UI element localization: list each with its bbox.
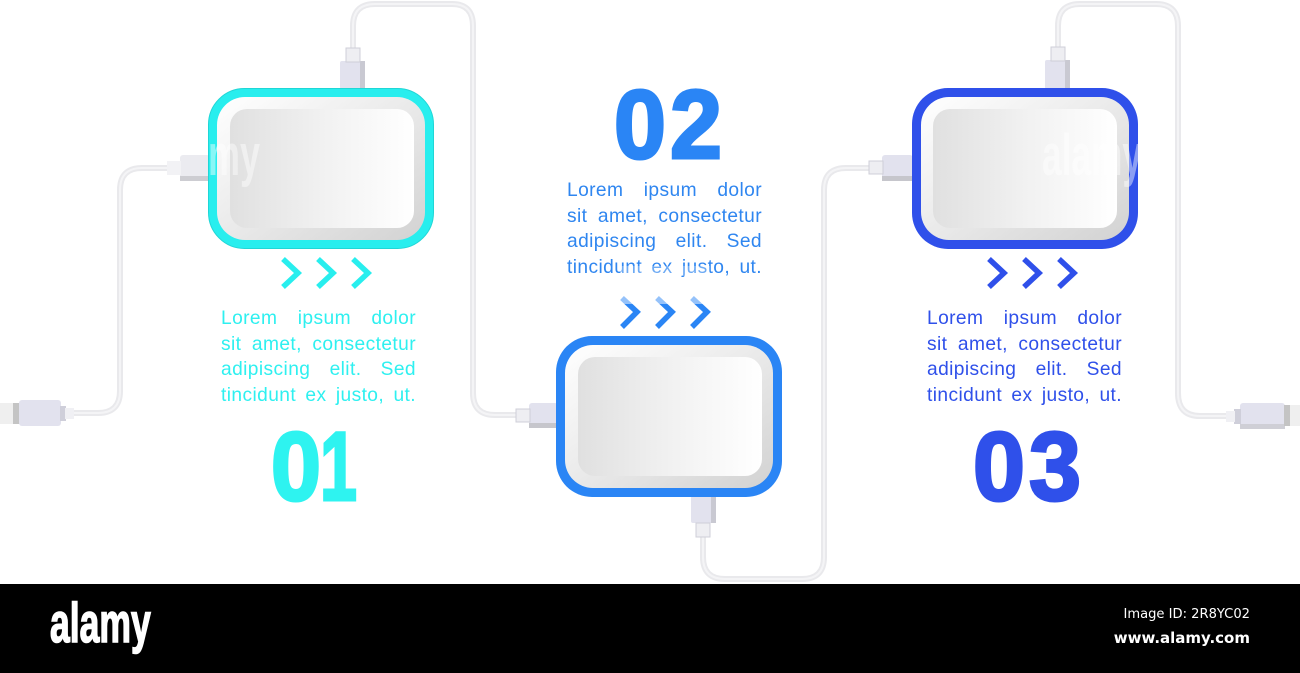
number 01: 1 [320, 412, 357, 521]
watermark on device 3: alamy [1042, 123, 1142, 188]
text block: step 3: sit amet, consectetur [927, 334, 1122, 355]
chevrons: step 2 [622, 298, 707, 327]
text block: step 2: tincidunt ex justo, ut. [567, 257, 762, 278]
number 03 [973, 412, 1081, 521]
cable: device 1 to device 2 [353, 4, 518, 415]
text block: step 3: adipiscing elit. Sed [927, 359, 1122, 380]
number 02: 0 [614, 70, 666, 179]
text block: step 2 [567, 180, 762, 278]
connector: device 2 bottom plug [691, 496, 716, 537]
image id: Image ID: 2R8YC02 [1123, 607, 1250, 622]
number 01: 0 [271, 412, 321, 521]
number 01 [271, 412, 357, 521]
text block: step 3 [927, 308, 1122, 406]
text block: step 2: Lorem ipsum dolor [567, 180, 762, 201]
connector: device 3 left plug [869, 155, 913, 181]
text block: step 2: adipiscing elit. Sed [567, 231, 762, 252]
cable: left connector to device 1 [70, 168, 170, 413]
device 2 [556, 336, 782, 497]
text block: step 3: Lorem ipsum dolor [927, 308, 1122, 329]
device 1 [208, 88, 434, 248]
text block: step 1 [221, 308, 416, 406]
connector: device 1 left plug [167, 155, 210, 181]
connector: device 1 top plug [340, 48, 365, 89]
text block: step 2: sit amet, consectetur [567, 206, 762, 227]
text block: step 1: sit amet, consectetur [221, 334, 416, 355]
number 02: 2 [670, 70, 722, 179]
connector: far right plug [1226, 403, 1300, 429]
cable: device 2 to device 3 [703, 168, 870, 579]
footer bar [0, 584, 1300, 673]
chevrons: step 1 [283, 259, 368, 287]
number 03: 0 [973, 412, 1025, 521]
number 02 [614, 70, 722, 179]
cable: device 3 to right connector [1058, 4, 1230, 416]
watermark on device 1: my [208, 123, 260, 188]
connector: device 2 left plug [516, 403, 558, 428]
connector: far left plug [0, 400, 74, 426]
device 3 [912, 88, 1138, 249]
text block: step 1: tincidunt ex justo, ut. [221, 385, 416, 406]
site url: www.alamy.com [1114, 629, 1250, 647]
text block: step 1: Lorem ipsum dolor [221, 308, 416, 329]
connector: device 3 top plug [1045, 47, 1070, 89]
chevrons: step 3 [989, 259, 1074, 287]
text block: step 1: adipiscing elit. Sed [221, 359, 416, 380]
number 03: 3 [1029, 412, 1081, 521]
footer logo: alamy [50, 591, 151, 654]
text block: step 3: tincidunt ex justo, ut. [927, 385, 1122, 406]
